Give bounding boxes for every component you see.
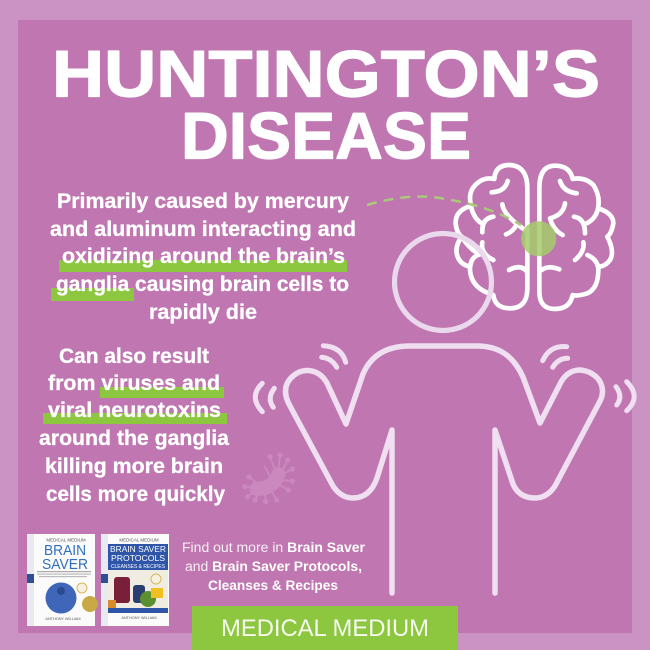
book: Brain Saver Protocols — [101, 534, 169, 626]
title: DISEASE — [181, 98, 471, 172]
text block: viral cause — [39, 345, 229, 506]
book: Brain Saver Protocols: PROTOCOLS — [111, 554, 165, 563]
text block: primary cause: and aluminum interacting and — [50, 218, 356, 241]
head — [394, 234, 492, 330]
text block: find out more: Find out more in Brain Saver — [182, 540, 366, 555]
body and arms — [286, 346, 602, 593]
book: Brain Saver: SAVER — [42, 556, 88, 573]
text block: primary cause: Primarily caused by mercury — [57, 190, 349, 213]
text block: viral cause: killing more brain — [45, 455, 223, 478]
arrow: dashed pointer to ganglia — [367, 197, 521, 225]
icon: brain — [456, 165, 613, 309]
text block: find out more — [182, 540, 366, 593]
book: Brain Saver: MEDICAL MEDIUM — [46, 538, 86, 542]
text block: primary cause: oxidizing around the brain’s — [62, 245, 345, 268]
book: Brain Saver Protocols: CLEANSES & RECIPES — [111, 564, 165, 570]
icon: virus — [242, 452, 295, 504]
book: Brain Saver — [27, 534, 98, 626]
text block: primary cause: ganglia causing brain cells to — [56, 273, 349, 296]
icon: person shrugging — [255, 234, 634, 593]
title: HUNTINGTON’S — [52, 36, 600, 110]
book: Brain Saver Protocols: MEDICAL MEDIUM — [119, 538, 159, 542]
title — [52, 36, 600, 172]
text block: primary cause — [50, 190, 356, 324]
text block: find out more: and Brain Saver Protocols, — [185, 559, 362, 574]
book: Brain Saver: ANTHONY WILLIAM — [45, 617, 81, 621]
text block: find out more: Cleanses & Recipes — [208, 578, 338, 593]
book: Brain Saver Protocols: ANTHONY WILLIAM — [121, 616, 157, 620]
motion lines — [255, 346, 634, 412]
text block: viral cause: cells more quickly — [46, 483, 225, 506]
book: Brain Saver: BRAIN — [44, 542, 86, 559]
text block: primary cause: rapidly die — [149, 301, 257, 324]
text block: viral cause: from viruses and — [48, 372, 220, 395]
banner: Medical Medium — [192, 606, 458, 650]
text block: viral cause: around the ganglia — [39, 427, 229, 450]
banner: Medical Medium: MEDICAL MEDIUM — [221, 615, 429, 642]
text block: viral cause: Can also result — [59, 345, 209, 368]
text block: viral cause: viral neurotoxins — [48, 399, 221, 422]
callout: ganglia highlight — [521, 221, 556, 256]
book: Brain Saver Protocols: BRAIN SAVER — [110, 545, 166, 554]
